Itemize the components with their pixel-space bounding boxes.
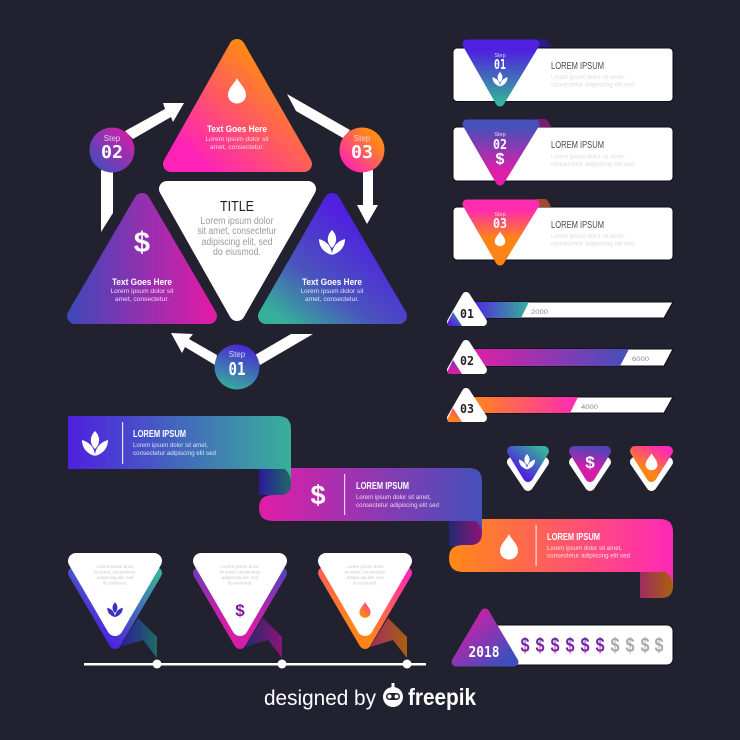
right triangle: leaf: Lorem ipsum dolor sit bbox=[300, 288, 364, 295]
left triangle: money: amet, consectetur. bbox=[115, 296, 169, 303]
panel: ribbon 2: Lorem ipsum dolor sit amet, bbox=[356, 494, 431, 501]
progress bar 01: 2000 bbox=[531, 309, 548, 316]
panel: ribbon 2 bbox=[259, 468, 482, 533]
footer credit: freepik bbox=[408, 684, 476, 710]
center title triangle: Lorem ipsum dolor bbox=[200, 216, 274, 227]
panel: ribbon 2: consectetur adipiscing elit sed bbox=[356, 502, 439, 509]
panel: step card 01 bbox=[453, 40, 673, 102]
right triangle: leaf bbox=[266, 201, 399, 316]
step 01 badge: 01 bbox=[228, 359, 246, 380]
arrow: step 1 to left bbox=[171, 333, 217, 365]
panel: step card 03: 03 bbox=[493, 217, 507, 232]
center title triangle bbox=[167, 189, 308, 313]
panel: ribbon 1: consectetur adipiscing elit sed bbox=[133, 450, 216, 457]
step 02 badge: Step bbox=[104, 134, 121, 143]
panel: ribbon 1 fold bbox=[259, 469, 291, 495]
progress bar 02 bbox=[447, 344, 673, 374]
panel: step card 02 bbox=[453, 119, 673, 181]
right triangle: leaf: amet, consectetur. bbox=[305, 296, 359, 303]
right triangle: leaf: Text Goes Here bbox=[302, 277, 362, 287]
center title triangle: adipiscing elit, sed bbox=[202, 237, 272, 248]
marker 1: Lorem ipsum dolor bbox=[96, 564, 134, 569]
top triangle: water: Text Goes Here bbox=[207, 124, 267, 134]
panel: step card 03: Step bbox=[494, 212, 506, 218]
step 03 badge: 03 bbox=[351, 142, 373, 163]
dollar icons bbox=[520, 635, 664, 657]
panel: ribbon 1: LOREM IPSUM bbox=[133, 428, 186, 440]
panel: step card 03: consectetur adipiscing elit sed bbox=[551, 240, 634, 248]
marker 2: $ bbox=[235, 601, 245, 620]
left triangle: money: Lorem ipsum dolor sit bbox=[110, 288, 174, 295]
arrow: left connector into step 2 bbox=[101, 170, 113, 232]
panel: step card 03: Lorem ipsum dolor sit amet, bbox=[551, 233, 625, 240]
progress bar 03 bbox=[447, 392, 673, 422]
panel: step card 02: $ bbox=[496, 151, 505, 168]
panel: ribbon 2: LOREM IPSUM bbox=[356, 480, 409, 492]
footer credit bbox=[264, 683, 476, 710]
marker 2: adipiscing elit, sed bbox=[222, 575, 259, 580]
marker 3: sit amet, consectetur bbox=[344, 570, 386, 574]
panel: step card 02: LOREM IPSUM bbox=[551, 139, 604, 151]
panel: ribbon 2 fold bbox=[449, 521, 482, 546]
top triangle: water: amet, consectetur. bbox=[210, 144, 264, 151]
progress bar 02: 02 bbox=[460, 354, 474, 368]
arrow: right connector into step 1 bbox=[255, 334, 313, 365]
badge: dollar: $ bbox=[585, 453, 595, 472]
step 02 badge bbox=[90, 128, 134, 172]
marker 2: sit amet, consectetur bbox=[219, 570, 261, 574]
panel: step card 02: 02 bbox=[493, 138, 507, 153]
panel: ribbon 3: LOREM IPSUM bbox=[547, 531, 600, 543]
panel: step card 02: consectetur adipiscing elit sed bbox=[551, 161, 634, 168]
marker 1: sit amet, consectetur bbox=[94, 570, 136, 574]
panel: step card 02: Lorem ipsum dolor sit amet, bbox=[551, 154, 625, 160]
panel: ribbon 2: $ bbox=[310, 480, 326, 510]
dollar icons: $ bbox=[550, 635, 560, 657]
arrow: step 2 to top bbox=[125, 103, 184, 139]
marker 1: do eiusmod. bbox=[103, 580, 127, 586]
step 03 badge bbox=[340, 128, 384, 172]
panel: step card 03: LOREM IPSUM bbox=[551, 219, 604, 231]
marker 3 bbox=[324, 561, 407, 658]
dollar icons: $ bbox=[536, 635, 544, 657]
panel: 2018 dollar rating: 2018 bbox=[468, 643, 500, 661]
center title triangle: sit amet, consectetur bbox=[198, 226, 277, 237]
dollar icons: $ bbox=[580, 635, 590, 657]
panel: step card 01: Lorem ipsum dolor sit amet, bbox=[551, 74, 625, 81]
marker 2: Lorem ipsum dolor bbox=[221, 564, 259, 569]
panel: 2018 dollar rating bbox=[456, 613, 673, 665]
dollar icons: $ bbox=[520, 635, 530, 657]
badge: leaf bbox=[512, 451, 544, 486]
marker 3: adipiscing elit, sed bbox=[347, 575, 384, 580]
panel: ribbon 1 bbox=[68, 416, 291, 482]
progress bar 03: 03 bbox=[460, 402, 474, 416]
progress bar 01: 01 bbox=[460, 307, 474, 321]
panel: step card 01: Step bbox=[494, 53, 506, 59]
progress bar 01 bbox=[447, 296, 673, 326]
marker 2: do eiusmod. bbox=[228, 580, 252, 586]
progress bar 03: 4000 bbox=[581, 404, 598, 411]
dollar icons: $ bbox=[626, 635, 634, 657]
marker 1 bbox=[74, 561, 157, 658]
dollar icons: $ bbox=[654, 635, 664, 657]
arrow: step 3 down bbox=[357, 170, 378, 224]
dollar icons: $ bbox=[566, 635, 574, 657]
center title triangle: TITLE bbox=[220, 198, 254, 215]
panel: ribbon 3 fold bbox=[640, 572, 673, 598]
dollar icons: $ bbox=[640, 635, 650, 657]
panel: triangle cycle diagram bbox=[75, 47, 399, 390]
badge: drop bbox=[635, 451, 668, 486]
marker 3: Lorem ipsum dolor bbox=[346, 564, 384, 569]
panel: ribbon 3: consectetur adipiscing elit sed bbox=[547, 552, 630, 560]
icon: freepik mascot bbox=[383, 683, 403, 707]
step 02 badge: 02 bbox=[101, 142, 123, 163]
panel: ribbon 1: Lorem ipsum dolor sit amet, bbox=[133, 442, 208, 449]
panel: ribbon 3 bbox=[449, 519, 673, 586]
panel: step card 01: LOREM IPSUM bbox=[551, 60, 604, 72]
timeline bbox=[84, 660, 426, 668]
progress bar 02: 6000 bbox=[632, 356, 649, 363]
panel: step card 03 bbox=[453, 199, 673, 261]
top triangle: water bbox=[171, 47, 304, 164]
marker 2 bbox=[199, 561, 282, 658]
center title triangle: do eiusmod. bbox=[213, 247, 261, 258]
step 01 badge: Step bbox=[229, 350, 246, 359]
top triangle: water: Lorem ipsum dolor sit bbox=[206, 136, 269, 143]
dollar icons: $ bbox=[596, 635, 604, 657]
left triangle: money bbox=[75, 201, 209, 316]
marker 3: do eiusmod. bbox=[353, 580, 377, 586]
panel: step card 01: 01 bbox=[494, 58, 506, 73]
badge: dollar bbox=[574, 451, 606, 486]
panel: step card 02: Step bbox=[494, 132, 506, 138]
arrow: top to step 3 connector bbox=[287, 94, 350, 138]
step 03 badge: Step bbox=[354, 134, 371, 143]
left triangle: money: Text Goes Here bbox=[112, 277, 172, 287]
dollar icons: $ bbox=[610, 635, 620, 657]
step 01 badge bbox=[214, 344, 260, 390]
footer credit: designed by bbox=[264, 687, 376, 710]
panel: ribbon 3: Lorem ipsum dolor sit amet, bbox=[547, 545, 622, 552]
marker 1: adipiscing elit, sed bbox=[97, 575, 134, 580]
left triangle: money: $ bbox=[134, 227, 150, 259]
panel: step card 01: consectetur adipiscing elit sed bbox=[551, 82, 634, 88]
